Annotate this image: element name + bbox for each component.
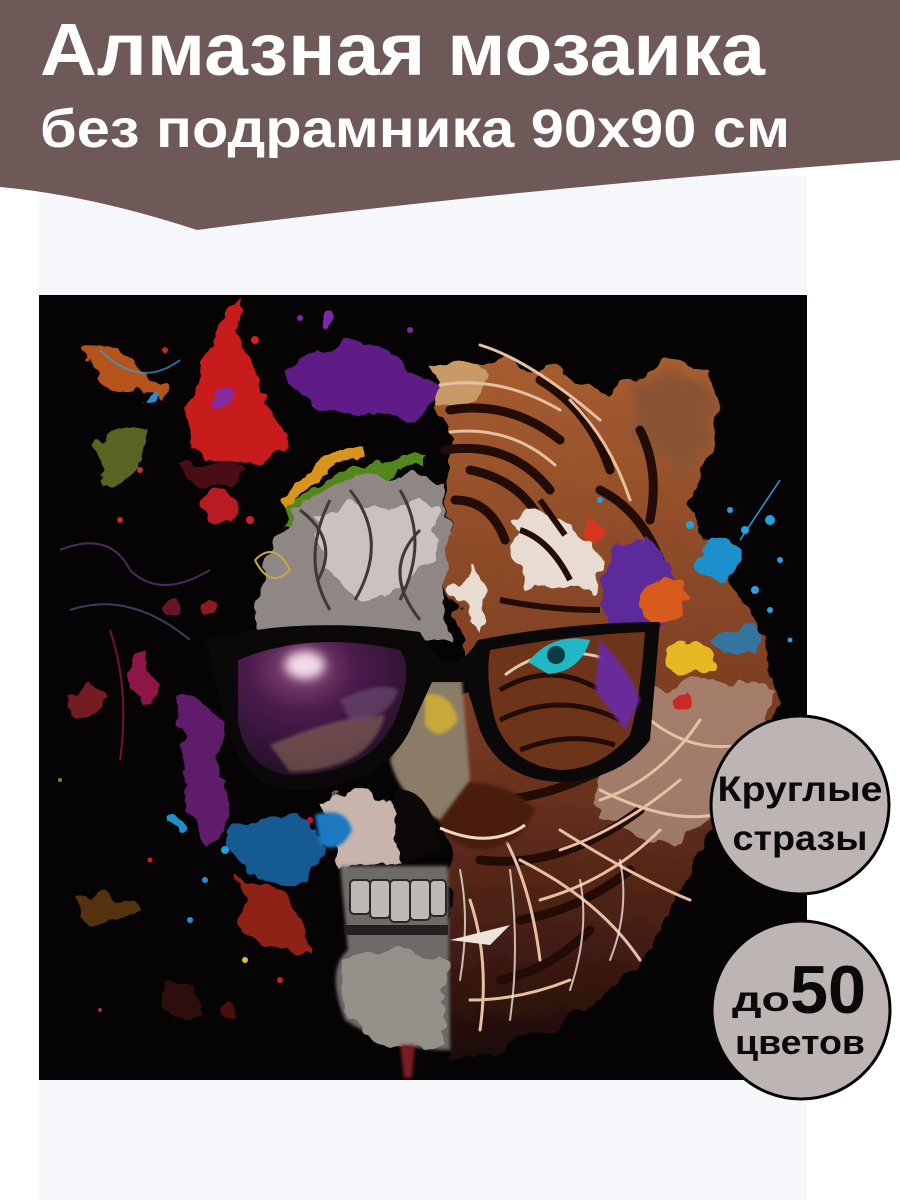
badge: up to 50 colours: 50	[790, 952, 866, 1028]
paint splashes: upper left	[75, 300, 440, 525]
subtitle: без подрамника 90х90 см	[40, 99, 790, 159]
badge: up to 50 colours: до	[732, 980, 790, 1019]
header banner	[0, 0, 900, 230]
curly line accents	[60, 350, 210, 760]
skull nose and cheek	[390, 680, 470, 820]
splatter dots: right	[597, 480, 792, 642]
badge: up to 50 colours	[712, 921, 890, 1099]
product background panel	[39, 176, 807, 1200]
white face markings	[452, 511, 600, 635]
tiger muzzle	[435, 783, 535, 849]
skull	[255, 472, 470, 1078]
badge: up to 50 colours: цветов	[735, 1024, 865, 1062]
sunglasses	[238, 622, 660, 782]
rainbow arc behind skull	[285, 450, 425, 530]
fine paint splatter	[58, 315, 413, 1012]
title: Алмазная мозаика	[40, 8, 766, 91]
glasses right lens with tiger fur	[488, 632, 645, 770]
skull teeth and jaw	[336, 866, 450, 1050]
badge: round rhinestones	[711, 716, 889, 894]
tiger ear	[630, 375, 718, 485]
paint splashes: right of tiger	[585, 520, 757, 731]
cream forelock	[428, 358, 490, 406]
tiger head	[428, 345, 780, 1060]
badge: round rhinestones: стразы	[732, 819, 868, 858]
right cheek fur	[590, 680, 775, 840]
badge: round rhinestones: Круглые	[718, 770, 882, 809]
artwork: tiger and skull with glasses	[39, 295, 807, 1080]
paint splashes: left side	[72, 597, 323, 1020]
tiger stripes	[440, 345, 760, 1030]
teal tiger eye	[528, 638, 590, 674]
